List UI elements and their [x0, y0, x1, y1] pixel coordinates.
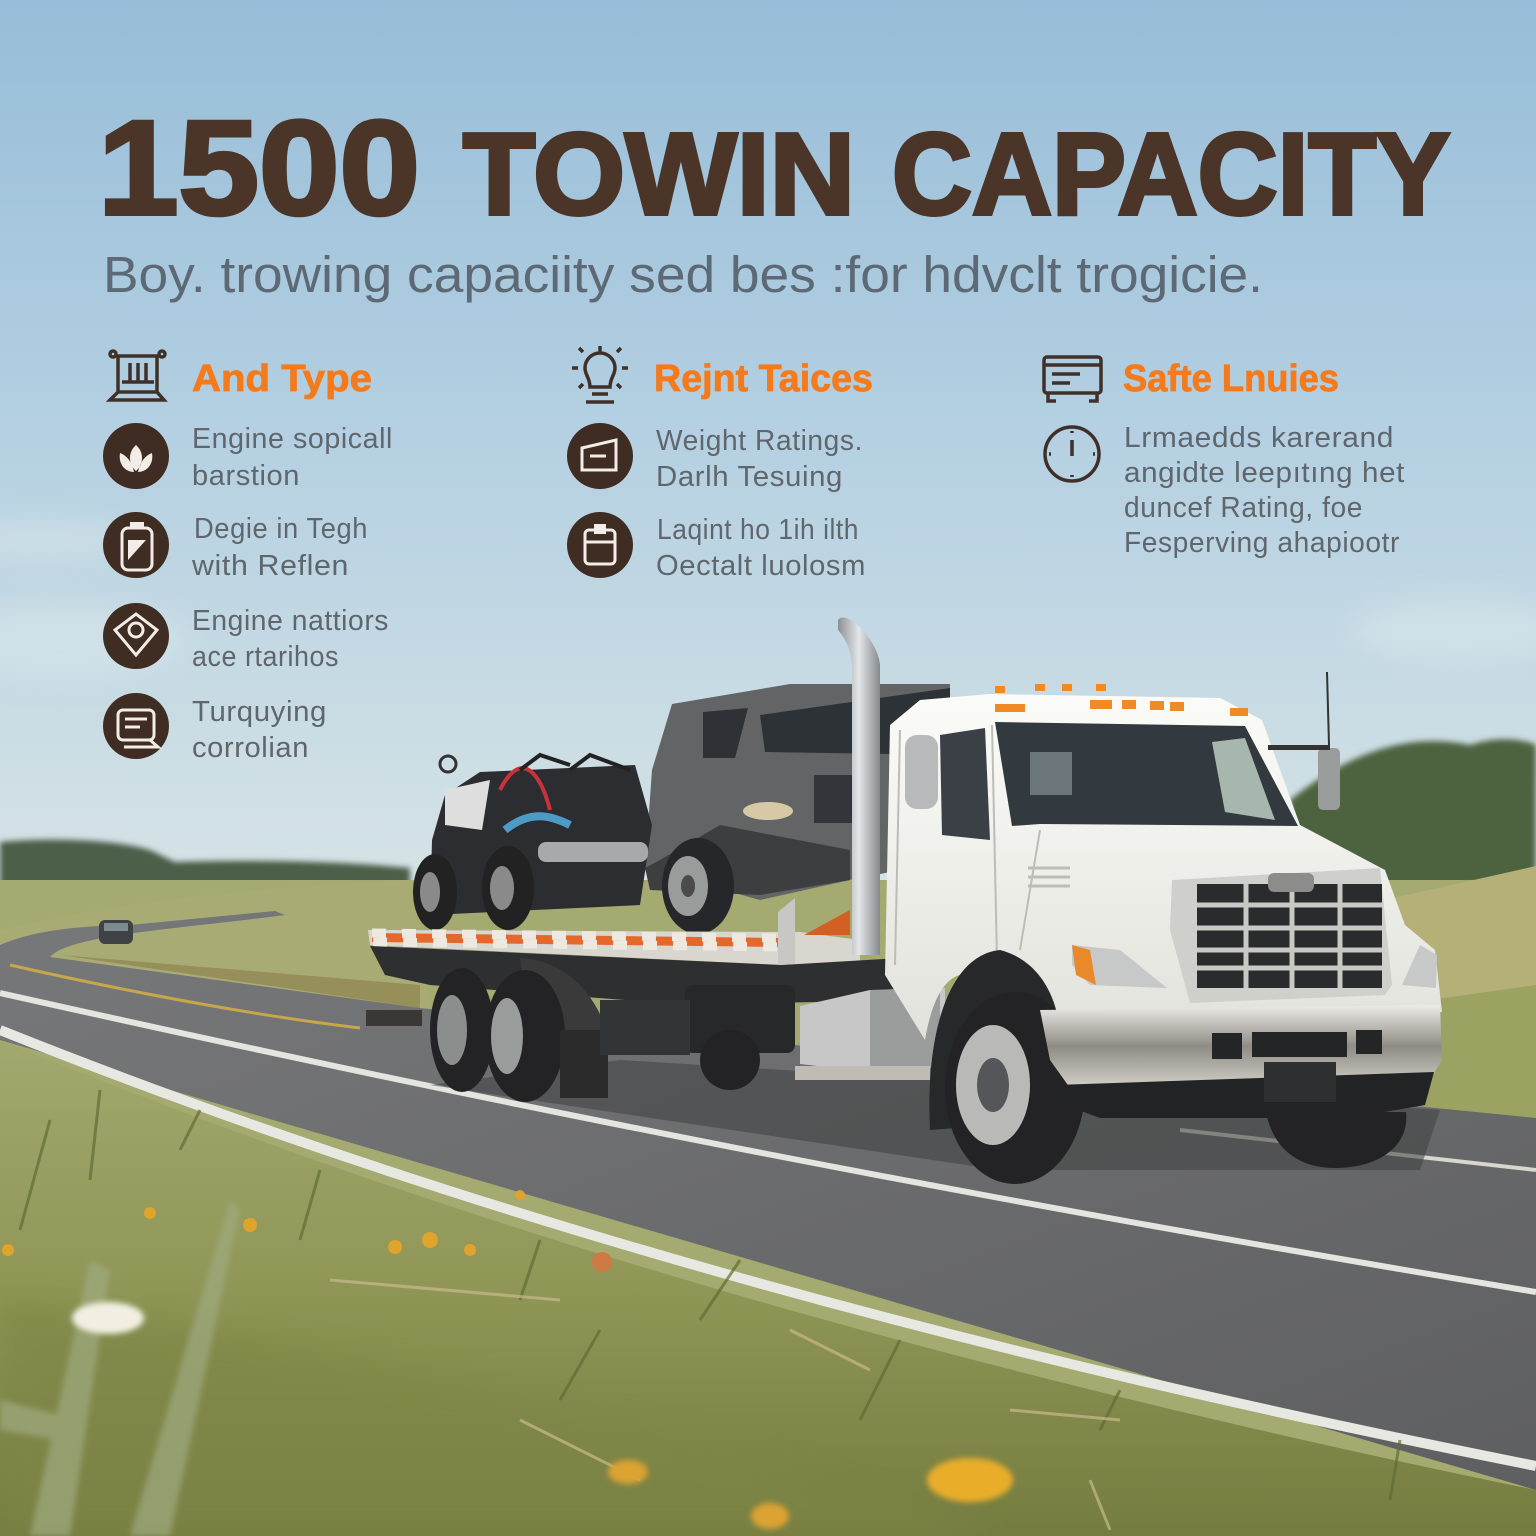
item: laqint	[567, 512, 866, 582]
item: engine nattiors: Engine nattiors	[192, 605, 389, 637]
background: sky	[0, 0, 1536, 960]
text block	[1124, 422, 1405, 559]
text block: Fesperving ahapiootr	[1124, 527, 1400, 559]
icon: clock	[1045, 427, 1099, 481]
grille	[1170, 868, 1392, 1003]
item: engine nattiors: ace rtarihos	[192, 641, 339, 673]
truck shadow	[430, 1060, 1440, 1170]
side window	[940, 728, 990, 840]
text block: duncef Rating, foe	[1124, 492, 1363, 524]
cab body	[885, 694, 1442, 1040]
loaded vehicle: grey cab	[645, 684, 950, 934]
road markings	[0, 965, 1536, 1466]
background: tree lines and fields	[0, 739, 1536, 1536]
heading: Rejnt Taices	[654, 358, 873, 400]
panel: And Type	[103, 351, 393, 764]
icon: machine frame	[110, 351, 165, 400]
title: TOWIN	[463, 109, 855, 239]
heading: Safte Lnuies	[1123, 358, 1339, 400]
headlights	[1072, 945, 1437, 988]
fuel tank and chassis	[600, 985, 945, 1090]
item: laqint: Oectalt luolosm	[656, 550, 866, 582]
title: 1500	[98, 94, 420, 243]
icon: display	[1044, 357, 1101, 401]
front bumper	[1040, 1005, 1442, 1118]
mirrors	[905, 672, 1340, 810]
road	[0, 911, 1536, 1490]
item: degie in tegh: Degie in Tegh	[194, 513, 368, 545]
item: turquying: corrolian	[192, 732, 309, 764]
panel: Rejnt Taices	[567, 346, 873, 582]
text block: Lrmaedds karerand	[1124, 422, 1394, 454]
item: weight ratings	[567, 423, 863, 493]
subtitle: Boy. trowing capaciity sed bes :for hdvclt trogicie.	[103, 246, 1263, 303]
front wheel arch and wheels	[929, 950, 1406, 1184]
item: weight ratings: Weight Ratings.	[656, 425, 863, 457]
item: degie in tegh	[103, 512, 368, 582]
flatbed deck	[366, 898, 900, 1026]
item: weight ratings: Darlh Tesuing	[656, 461, 843, 493]
item: engine nattiors	[103, 603, 389, 673]
roadside grass foreground	[0, 1040, 1536, 1536]
heading: And Type	[192, 358, 372, 400]
loaded vehicle: ATV engine	[413, 755, 652, 930]
title: CAPACITY	[892, 109, 1450, 239]
item: turquying: Turquying	[192, 696, 327, 728]
title	[98, 94, 1450, 243]
distant car	[99, 920, 133, 944]
item: degie in tegh: with Reflen	[191, 550, 349, 582]
windshield	[995, 722, 1298, 826]
rear wheels	[430, 958, 608, 1102]
icon: light bulb	[572, 346, 628, 402]
background: clouds	[0, 520, 1536, 676]
panel: Safte Lnuies	[1044, 357, 1405, 559]
item: engine sopicall: Engine sopicall	[192, 423, 393, 455]
door and hood details	[895, 725, 1070, 965]
item: engine sopicall: barstion	[192, 460, 300, 492]
cab roof lights	[995, 684, 1248, 716]
flatbed truck	[366, 617, 1442, 1184]
exhaust stack	[838, 617, 880, 955]
item: laqint: Laqint ho 1ih ilth	[657, 514, 859, 546]
item: turquying	[103, 693, 327, 764]
item: engine sopicall	[103, 423, 393, 492]
text block: angidte leepıtıng het	[1124, 457, 1405, 489]
